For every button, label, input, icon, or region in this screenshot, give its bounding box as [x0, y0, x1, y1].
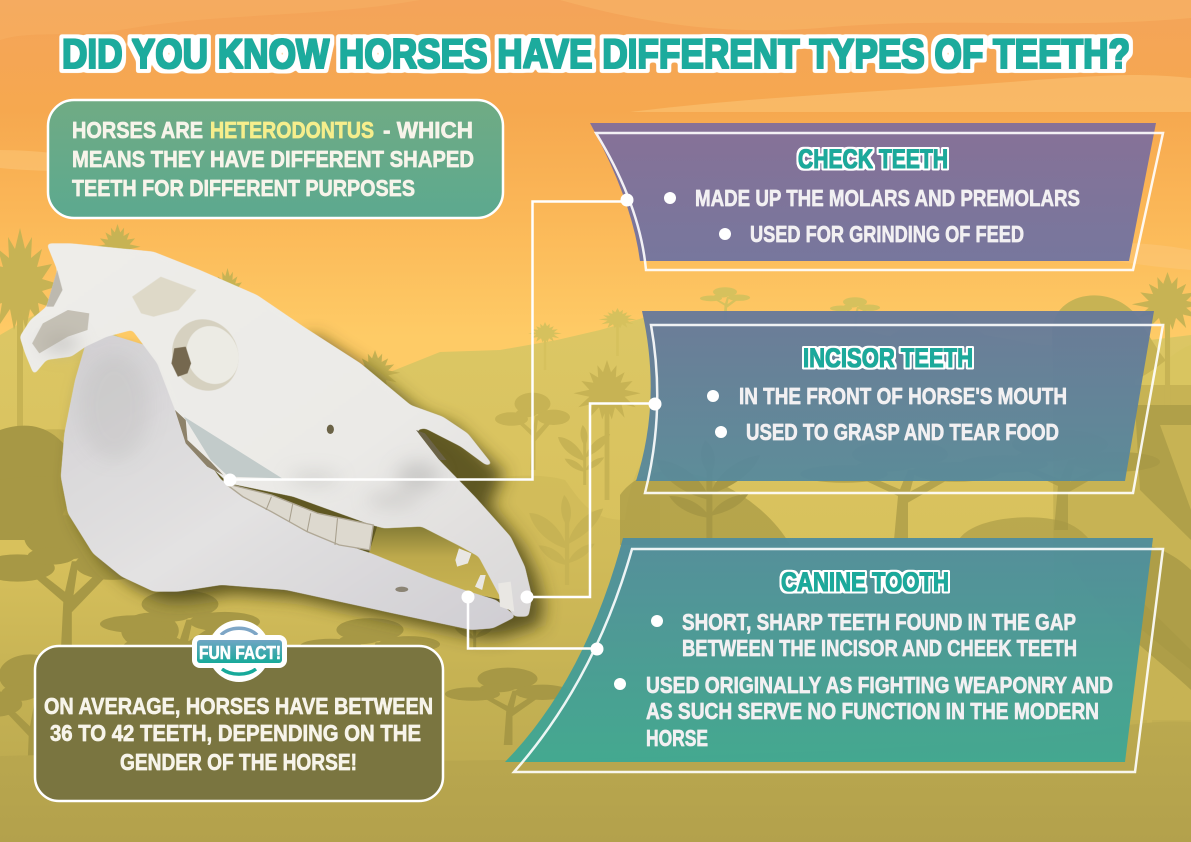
back of skull detail — [32, 310, 89, 353]
background: silhouette trees — [528, 287, 880, 370]
panel: canine tooth: CANINE TOOTH — [781, 567, 949, 597]
panel: heterodontus intro: MEANS THEY HAVE DIFFERENT SHAPED — [72, 146, 474, 172]
panel: canine tooth: AS SUCH SERVE NO FUNCTION IN THE MODERN — [646, 698, 1099, 724]
panel: heterodontus intro: TEETH FOR DIFFERENT PURPOSES — [72, 175, 415, 201]
panel: canine tooth: SHORT, SHARP TEETH FOUND IN THE GAP — [682, 609, 1076, 635]
lower jaw — [61, 333, 516, 630]
panel: incisor teeth — [636, 311, 1163, 493]
panel: fun fact: 36 TO 42 TEETH, DEPENDING ON THE — [50, 720, 421, 746]
skull shading — [43, 333, 439, 507]
connector: skull to cheek teeth — [224, 194, 634, 486]
canine and incisors — [455, 548, 514, 612]
panel: incisor teeth: USED TO GRASP AND TEAR FOOD — [746, 419, 1059, 445]
badge: fun fact — [192, 620, 287, 682]
background: ground — [0, 721, 1191, 842]
panel: cheek teeth: MADE UP THE MOLARS AND PREMOLARS — [695, 185, 1080, 211]
skull cavity: gap behind teeth — [184, 417, 282, 478]
panel: incisor teeth: IN THE FRONT OF HORSE'S MOUTH — [739, 383, 1067, 409]
panel: cheek teeth — [590, 123, 1163, 270]
skull photo — [20, 243, 544, 639]
temporal fossa — [132, 277, 196, 317]
panel: heterodontus intro: HORSES ARE — [72, 117, 203, 143]
panel: cheek teeth: USED FOR GRINDING OF FEED — [750, 221, 1024, 247]
panel: heterodontus intro: HETERODONTUS — [210, 117, 374, 143]
panel: fun fact — [35, 620, 443, 801]
panel: heterodontus intro — [48, 100, 503, 218]
panel: canine tooth: HORSE — [646, 725, 708, 751]
panel: cheek teeth: CHECK TEETH — [798, 144, 948, 174]
panel: fun fact: ON AVERAGE, HORSES HAVE BETWEEN — [44, 693, 433, 719]
panel: canine tooth: BETWEEN THE INCISOR AND CHEEK TEETH — [682, 635, 1077, 661]
skull shadow — [72, 335, 544, 639]
badge: fun fact: FUN FACT! — [199, 643, 281, 663]
panel: incisor teeth: INCISOR TEETH — [803, 343, 973, 373]
cheek teeth row — [225, 483, 373, 550]
panel: canine tooth: USED ORIGINALLY AS FIGHTING WEAPONRY AND — [646, 672, 1113, 698]
connector: skull to canine tooth — [462, 590, 604, 656]
connector: skull to incisor teeth — [520, 398, 662, 604]
panel: canine tooth — [505, 538, 1163, 772]
panel: fun fact: GENDER OF THE HORSE! — [120, 749, 357, 775]
nostril shade and foramen — [416, 430, 446, 460]
eye socket — [164, 312, 247, 398]
background: clouds — [0, 0, 1191, 270]
panel: heterodontus intro: - WHICH — [383, 117, 473, 143]
gap: background seen through the open mouth — [368, 522, 504, 600]
background: far hills — [0, 300, 1191, 842]
upper skull — [20, 243, 532, 617]
